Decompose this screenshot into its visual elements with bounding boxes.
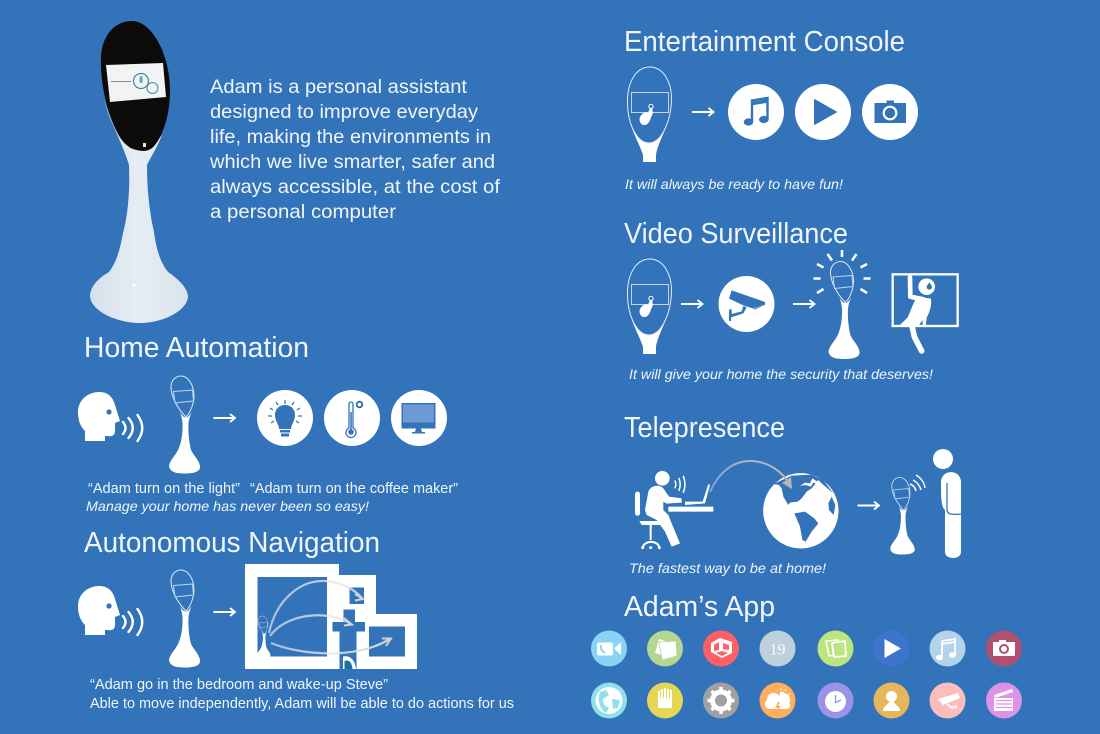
- caption: telepresence: The fastest way to be at home!: [629, 560, 826, 576]
- caption: home automation: [86, 481, 458, 514]
- product photo: Adam robot: [90, 21, 188, 323]
- app icon: calendar: [760, 630, 796, 666]
- icon: person at laptop: [635, 471, 713, 549]
- icon: security camera: [718, 276, 774, 332]
- icon: speaking head: [78, 392, 142, 441]
- icon: robot touch: [627, 259, 672, 354]
- intro text: [209, 76, 501, 223]
- arrow: [214, 414, 235, 422]
- arrow: curved: [710, 461, 792, 492]
- app icon: play: [874, 630, 910, 666]
- caption: autonomous navigation: [90, 677, 514, 712]
- caption: autonomous navigation: Able to move independently, Adam will be able to do actions for us: [90, 696, 514, 712]
- app icon: weather: [760, 682, 796, 718]
- heading: Telepresence: Telepresence: [624, 412, 785, 444]
- caption: home automation: “Adam turn on the coffee maker”: [250, 481, 458, 497]
- icon: alarmed robot: [814, 250, 870, 359]
- app icon: gallery: [818, 630, 854, 666]
- icon: speaking head: [78, 586, 142, 635]
- arrow: [793, 300, 814, 308]
- icon: thermometer: [324, 390, 380, 446]
- intro text: designed to improve everyday: [210, 101, 478, 123]
- arrow: [214, 608, 235, 616]
- intro text: Adam is a personal assistant: [210, 76, 468, 98]
- app icon: video call: [591, 630, 627, 666]
- app icon: calendar: 19: [770, 642, 786, 658]
- app icon: hand: [647, 682, 683, 718]
- app icon: camera: [986, 630, 1022, 666]
- app icon: clock: [818, 682, 854, 718]
- caption: entertainment console: It will always be ready to have fun!: [625, 176, 843, 192]
- icon: play: [795, 84, 851, 140]
- icon: robot outline: [169, 376, 200, 474]
- icon: robot with signal: [890, 475, 925, 555]
- icon: globe: [763, 473, 838, 548]
- heading: Entertainment Console: Entertainment Console: [624, 26, 905, 58]
- caption: video surveillance: It will give your home the security that deserves!: [629, 366, 933, 382]
- panel: autonomous navigation: [78, 564, 417, 669]
- icon: burglar at window: [893, 274, 958, 351]
- panel: telepresence: [635, 449, 961, 558]
- caption: autonomous navigation: “Adam go in the bedroom and wake-up Steve”: [90, 677, 388, 693]
- icon: robot touch: [627, 67, 672, 162]
- floor plan: [245, 564, 417, 669]
- intro text: always accessible, at the cost of: [210, 176, 501, 198]
- icon: music: [728, 84, 784, 140]
- icon: monitor: [391, 390, 447, 446]
- app icon: clapperboard: [986, 682, 1022, 718]
- app icon grid: [591, 630, 1022, 718]
- intro text: which we live smarter, safer and: [209, 151, 495, 173]
- heading: Autonomous Navigation: Autonomous Navigation: [84, 527, 380, 559]
- panel: entertainment console: [627, 67, 918, 162]
- heading: Video Surveillance: Video Surveillance: [624, 218, 848, 250]
- caption: home automation: Manage your home has never been so easy!: [86, 498, 369, 514]
- icon: robot outline: [169, 570, 200, 668]
- app icon: notes: [647, 630, 683, 666]
- app icon: music: [930, 630, 966, 666]
- app icon: 3D room: [703, 630, 739, 666]
- caption: home automation: “Adam turn on the light”: [88, 481, 240, 497]
- app icon: security camera: [930, 682, 966, 718]
- app icon: person: [874, 682, 910, 718]
- icon: light bulb: [257, 390, 313, 446]
- panel: video surveillance: [627, 250, 958, 359]
- intro text: life, making the environments in: [210, 126, 491, 148]
- icon: camera: [862, 84, 918, 140]
- arrow: [681, 300, 702, 308]
- icon: standing person: [933, 449, 961, 558]
- intro text: a personal computer: [210, 201, 397, 223]
- app icon: globe: [591, 682, 627, 718]
- arrow: [692, 108, 714, 116]
- arrow: [858, 502, 879, 510]
- heading: Home Automation: Home Automation: [84, 332, 309, 364]
- app icon: settings: [703, 682, 739, 718]
- heading: Adam's App: Adam’s App: [624, 591, 775, 623]
- panel: home automation: [78, 376, 447, 474]
